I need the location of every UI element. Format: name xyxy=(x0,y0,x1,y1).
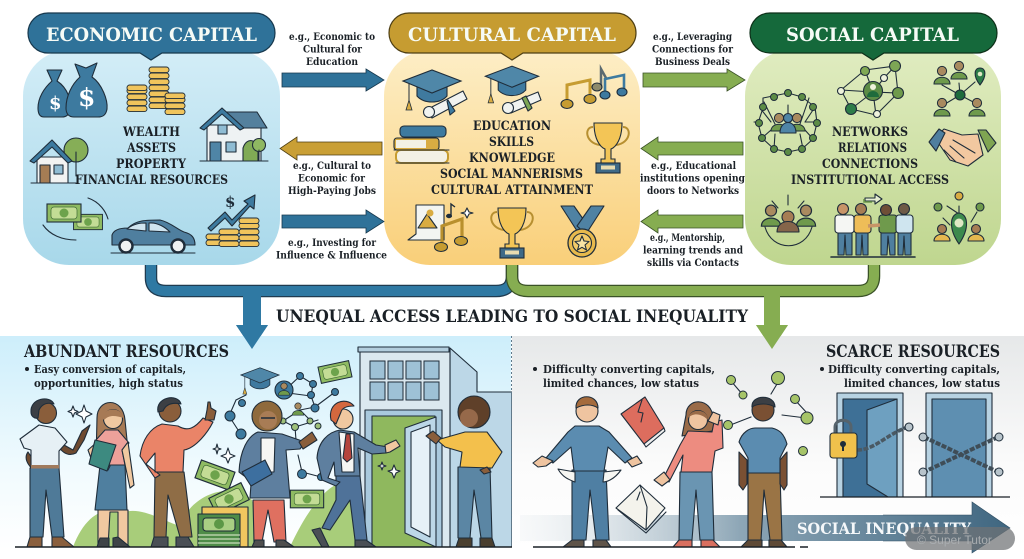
icon: trophy xyxy=(587,123,629,173)
person: man pointing xyxy=(140,398,216,547)
label: e.g., Educational xyxy=(651,160,736,172)
panel: economic capital xyxy=(23,13,280,265)
icon: group around table xyxy=(761,195,816,246)
person: worried woman xyxy=(654,402,723,547)
label xyxy=(640,160,746,197)
blue arrow tip over panel xyxy=(236,325,268,349)
left ground line xyxy=(15,546,512,548)
icon: graduation cap xyxy=(241,368,279,394)
label: High-Paying Jobs xyxy=(288,185,376,197)
label xyxy=(652,31,733,68)
label: e.g., Mentorship, xyxy=(650,232,725,244)
text: social capital items: RELATIONS xyxy=(838,141,907,156)
person: woman with folder xyxy=(88,402,134,547)
label xyxy=(643,232,744,269)
icon: handshake xyxy=(929,129,996,166)
arrow xyxy=(282,210,384,233)
label: Education xyxy=(306,56,358,68)
social inequality arrow xyxy=(520,502,1010,553)
label: e.g., Cultural to xyxy=(293,160,371,172)
panel background: abundant xyxy=(0,336,511,550)
icon: second graduation cap with diploma xyxy=(485,66,541,114)
icon: medal xyxy=(561,206,604,257)
text: social capital items: INSTITUTIONAL ACCESS xyxy=(791,173,949,188)
label: Business Deals xyxy=(655,56,730,68)
conversion: cultural to economic xyxy=(280,137,382,197)
icon: radial people network xyxy=(754,90,820,156)
label: e.g., Leveraging xyxy=(653,31,733,43)
person: man with empty pockets xyxy=(533,397,642,547)
person: woman in yellow xyxy=(426,396,502,547)
text: social capital items: CONNECTIONS xyxy=(822,157,918,172)
icon: group network with pin xyxy=(934,61,985,116)
door: with padlock and chain xyxy=(830,393,913,497)
heading: economic capital: ECONOMIC CAPITAL xyxy=(46,24,257,46)
label: e.g., Economic to xyxy=(289,31,375,43)
label: learning trends and xyxy=(643,244,744,256)
text: left scarce bullet xyxy=(533,362,715,390)
arrow xyxy=(282,69,384,91)
text: left scarce bullet: limited chances, low status xyxy=(543,376,699,390)
arrow xyxy=(643,69,745,91)
label: Influence & Influence xyxy=(276,250,387,262)
icon: cash bills xyxy=(43,198,108,240)
icon: central person network xyxy=(838,60,904,118)
label: doors to Networks xyxy=(647,185,739,197)
text: right scarce bullet: limited chances, low status xyxy=(844,376,1000,390)
icon: broken red book xyxy=(621,397,665,447)
text: economic capital items: FINANCIAL RESOURCES xyxy=(75,173,228,188)
icon: car xyxy=(111,220,195,253)
heading: cultural capital: CULTURAL CAPITAL xyxy=(408,24,616,46)
icon: second trophy xyxy=(491,208,533,258)
icon: art scroll and music note xyxy=(408,204,473,252)
panel: abundant resources xyxy=(0,325,512,550)
flying bills xyxy=(195,361,352,515)
label: Cultural for xyxy=(303,44,362,56)
icon: growth arrow and coins: $ xyxy=(225,193,235,211)
icon: growth arrow and coins xyxy=(206,193,259,247)
icon: money bags: $ xyxy=(78,83,95,112)
label: institutions opening xyxy=(640,172,746,184)
text: economic capital items xyxy=(75,125,228,188)
label: Economic for xyxy=(298,172,365,184)
connector: economic capital to abundant resources xyxy=(151,264,512,349)
icon: graduation cap with diploma xyxy=(403,70,467,118)
social inequality arrow: SOCIAL INEQUALITY xyxy=(797,519,972,538)
scattered nodes xyxy=(724,372,813,456)
icon: large house xyxy=(200,108,268,161)
conversion: economic to cultural xyxy=(282,31,384,91)
icon: small house with tree xyxy=(30,138,88,183)
arrow xyxy=(641,137,743,160)
label: e.g., Investing for xyxy=(288,237,376,249)
text: abundant bullet xyxy=(25,362,186,390)
text: right scarce bullet xyxy=(820,362,1000,390)
background bushes xyxy=(73,482,370,547)
label: skills via Contacts xyxy=(647,257,739,269)
heading: economic capital xyxy=(28,13,275,60)
door: chained shut xyxy=(919,393,1003,497)
text: social capital items xyxy=(791,125,949,188)
door floor line xyxy=(820,496,1010,498)
text: abundant bullet: opportunities, high status xyxy=(34,376,183,390)
text: economic capital items: PROPERTY xyxy=(116,157,187,172)
label: Connections for xyxy=(652,44,733,56)
icon: money bags xyxy=(38,63,107,117)
cash pile xyxy=(198,507,248,547)
building xyxy=(358,347,512,547)
sparkles xyxy=(68,405,400,478)
icon: torn open book xyxy=(616,485,666,533)
text: economic capital items: ASSETS xyxy=(126,141,176,156)
person: woman in blazer xyxy=(239,401,317,547)
title: unequal access: UNEQUAL ACCESS LEADING TO SOCIAL INEQUALITY xyxy=(276,307,749,327)
label xyxy=(288,160,376,197)
heading: abundant resources: ABUNDANT RESOURCES xyxy=(23,342,229,362)
text: social capital items: NETWORKS xyxy=(832,125,908,140)
icon: location pin with people xyxy=(934,192,984,244)
heading: cultural capital xyxy=(389,13,636,60)
panel background: scarce xyxy=(512,336,1024,550)
text: left scarce bullet: Difficulty converting capitals, xyxy=(543,362,715,376)
conversion: investing for influence xyxy=(276,210,387,262)
panel background: social xyxy=(745,50,1001,265)
text: cultural capital items: KNOWLEDGE xyxy=(469,151,555,166)
text: cultural capital items: SKILLS xyxy=(489,135,534,150)
text: right scarce bullet: Difficulty converting capitals, xyxy=(828,362,1000,376)
arrow xyxy=(280,137,382,160)
panel divider xyxy=(510,336,512,545)
person: man in suit xyxy=(312,401,400,547)
heading: social capital: SOCIAL CAPITAL xyxy=(786,24,959,46)
person: man in white shirt xyxy=(20,399,90,547)
icon: group of people shaking hands xyxy=(831,194,915,257)
text: cultural capital items: SOCIAL MANNERISMS xyxy=(440,167,583,182)
network nodes xyxy=(225,372,338,480)
arrow xyxy=(641,210,743,233)
text: abundant bullet: Easy conversion of capitals, xyxy=(34,362,186,376)
panel background: economic xyxy=(23,50,280,265)
connector: cultural and social capital to scarce resources xyxy=(512,264,874,349)
text: cultural capital items xyxy=(431,119,593,198)
label xyxy=(289,31,375,68)
green arrow tip over panel xyxy=(756,325,788,349)
person: man in blue tee xyxy=(739,397,787,547)
panel: scarce resources xyxy=(512,325,1024,553)
panel background: cultural xyxy=(384,50,640,265)
panel: cultural capital xyxy=(384,13,640,265)
text: cultural capital items: CULTURAL ATTAINMENT xyxy=(431,183,593,198)
watermark: © Super Tutor xyxy=(917,533,992,547)
icon: money bags: $ xyxy=(49,93,62,114)
conversion: social to business deals xyxy=(643,31,745,91)
text: economic capital items: WEALTH xyxy=(122,125,180,140)
conversion: educational institutions to networks xyxy=(640,137,746,197)
conversion: mentorship via contacts xyxy=(641,210,744,269)
icon: coin stacks xyxy=(127,67,185,115)
icon: book stack xyxy=(394,126,449,163)
panel: social capital xyxy=(745,13,1001,265)
watermark xyxy=(905,527,1015,550)
icon: music notes xyxy=(561,69,627,108)
text: cultural capital items: EDUCATION xyxy=(473,119,551,134)
label xyxy=(276,237,387,262)
right ground line xyxy=(533,546,808,548)
heading: social capital xyxy=(750,13,997,60)
